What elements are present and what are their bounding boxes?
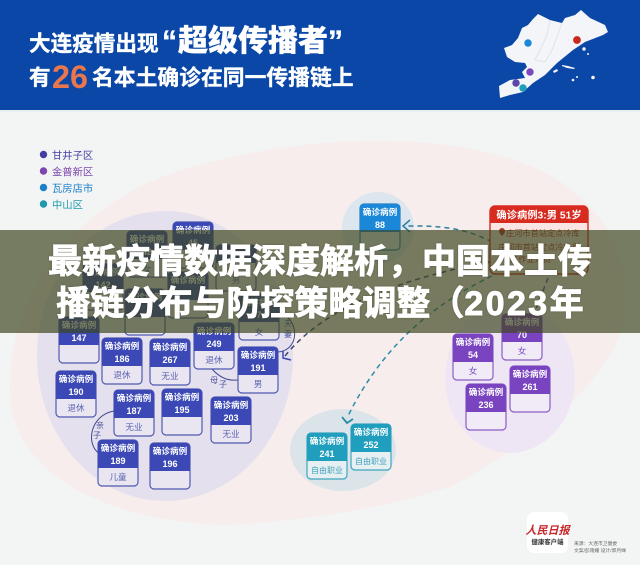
case card 267: 确诊病例 [153, 341, 188, 352]
case card 45 [173, 222, 213, 268]
case card 195: 195 [174, 405, 190, 415]
case card 190: 退休 [67, 402, 85, 413]
case card 191: 191 [250, 363, 266, 373]
case 3 callout card: 庄河市首站定点冷库 [506, 228, 580, 238]
case card 267: 267 [162, 355, 178, 365]
relationship arc: 亲子 [92, 411, 114, 454]
logo: People's Daily health client [526, 512, 571, 553]
teal cluster background [290, 409, 396, 491]
arrowhead: teal cluster [342, 417, 353, 423]
case card 203: 无业 [222, 429, 240, 439]
violet cluster background [445, 303, 575, 453]
case card 54: 确诊病例 [456, 336, 491, 347]
case card upper: 女 [143, 263, 152, 274]
case card 191 [238, 347, 278, 393]
case card 241: 自由职业 [311, 465, 343, 475]
case card 147: 确诊病例 [62, 319, 97, 330]
case card 女: 女 [255, 326, 264, 337]
case card 267 [150, 339, 190, 385]
case card 189: 确诊病例 [101, 442, 136, 453]
case card 252: 自由职业 [355, 456, 387, 466]
case card 261: 261 [522, 382, 538, 392]
case card 190: 确诊病例 [59, 373, 94, 384]
case card 186: 退休 [113, 369, 131, 380]
case card 236 [466, 384, 506, 430]
purple cluster background [37, 211, 293, 501]
header highlighted phrase: “ [162, 25, 177, 58]
case card center [168, 272, 208, 318]
case card 191: 确诊病例 [241, 349, 276, 360]
overlay headline [48, 242, 592, 323]
arrow: case 3 to teal cluster [347, 272, 500, 418]
case card 189: 189 [110, 456, 126, 466]
case card 190: 190 [68, 387, 84, 397]
case card 女 [239, 294, 279, 340]
case card 147 [59, 317, 99, 363]
logo: People's Daily health client: 人民日报 [526, 524, 571, 537]
legend: 瓦房店市 [52, 182, 93, 195]
case card 88: 确诊病例 [363, 206, 398, 217]
case card 249: 退休 [205, 354, 223, 365]
legend: 中山区 [52, 198, 83, 212]
case card lower center: 确诊病例 [128, 291, 163, 302]
case card 252: 确诊病例 [354, 426, 389, 437]
case card 241: 确诊病例 [310, 435, 345, 446]
case card 196 [150, 443, 190, 489]
case card 195 [162, 389, 202, 435]
case card 186: 确诊病例 [105, 340, 140, 351]
case 3 callout card: 确诊病例3:男 51岁 [496, 208, 582, 222]
case card 190 [56, 371, 96, 417]
case card upper [127, 231, 167, 277]
case card 54 [453, 334, 493, 380]
header highlighted phrase: ” [328, 25, 343, 58]
case card 187: 187 [126, 406, 142, 416]
case card 70: 女 [518, 345, 527, 356]
relationship arc: 母子 [210, 369, 238, 389]
case card 203 [211, 397, 251, 443]
icon: Dalian map [499, 10, 608, 98]
case card 241 [307, 433, 347, 479]
header line one: 大连疫情出现 [29, 31, 159, 56]
case card 236: 236 [478, 400, 494, 410]
legend: 甘井子区 [52, 149, 93, 162]
case card 88: 88 [375, 220, 385, 230]
case card 189: 儿童 [109, 471, 127, 482]
case card 142 [83, 264, 123, 310]
source credits: 来源：大连市卫健委 [574, 540, 617, 547]
case card 195: 确诊病例 [165, 391, 200, 402]
header line two prefix: 有 [29, 65, 51, 90]
case card 男: 男 [232, 275, 240, 285]
relationship arc: 母子: 子 [219, 380, 227, 389]
legend: 金普新区 [52, 166, 93, 178]
relationship arc: 亲子: 子 [93, 431, 101, 440]
case card 男 [216, 245, 256, 291]
pink background region [10, 141, 625, 525]
case card 249: 249 [206, 339, 222, 349]
header number 26: 26 [52, 59, 88, 95]
case card center: 确诊病例 [171, 274, 206, 285]
case card 女: 7 [256, 310, 262, 320]
overlay headline: 最新疫情数据深度解析，中国本土传 [48, 243, 592, 281]
case card 54: 54 [468, 350, 478, 360]
arrow: case 3 to left cluster [285, 262, 490, 356]
relationship arc: 亲子: 亲 [96, 420, 104, 430]
case 3 callout card: 庄河市首站定点冷库员 [498, 242, 580, 252]
arrowhead: left cluster [283, 351, 291, 360]
case card 186: 186 [114, 354, 130, 364]
case card 186 [102, 338, 142, 384]
relationship arc: 夫妻 [278, 311, 295, 352]
case card upper: 42 [142, 247, 152, 257]
arrow: case 3 to case 88 [405, 226, 492, 242]
arrow: case 3 to case 70 [534, 278, 548, 314]
case card 189 [98, 440, 138, 486]
header line two: 名本土确诊在同一传播链上 [92, 65, 354, 90]
case card 142: 确诊病例 [86, 266, 121, 277]
case card upper: 确诊病例 [130, 233, 165, 244]
overlay band [0, 230, 640, 333]
case card 191: 男 [254, 379, 262, 389]
blue cluster background [342, 192, 414, 264]
case card 203: 确诊病例 [214, 399, 249, 410]
case card 女: 确诊病例 [242, 296, 277, 307]
case card 196: 196 [162, 459, 178, 469]
legend [40, 149, 93, 212]
arrowhead: case 88 [403, 220, 410, 232]
case card 236: 确诊病例 [469, 386, 504, 397]
header banner [0, 0, 640, 112]
case card 252: 252 [363, 440, 379, 450]
icon: location pin [499, 228, 505, 236]
relationship arc: 夫妻: 夫 [284, 318, 292, 328]
case card lower center [125, 289, 165, 335]
case card 261: 确诊病例 [513, 368, 548, 379]
case card 249: 确诊病例 [197, 325, 232, 336]
case card 142: 142 [95, 280, 111, 290]
case card 54: 女 [469, 365, 478, 376]
overlay headline: 播链分布与防控策略调整（2023年 [56, 285, 584, 323]
case card 88 [360, 204, 400, 250]
case card 70 [502, 314, 542, 360]
case card 261 [510, 366, 550, 412]
case 3 callout card: 工作业人员 [510, 254, 551, 264]
logo: People's Daily health client: 健康客户端 [532, 537, 564, 546]
source credits: 文案/彭雨姗 设计/郭月婵 [574, 547, 626, 554]
relationship arc: 母子: 母 [210, 376, 218, 385]
case card 147: 147 [71, 333, 87, 343]
case card 196: 确诊病例 [153, 445, 188, 456]
case card 45: 45 [188, 238, 198, 248]
case card 241: 241 [319, 449, 335, 459]
case card 187: 无业 [125, 422, 143, 432]
case card 45: 确诊病例 [176, 224, 211, 235]
case 3 callout card [490, 206, 588, 274]
case card 267: 无业 [161, 371, 179, 381]
case card 203: 203 [223, 413, 239, 423]
case card 70: 确诊病例 [505, 316, 540, 327]
header highlighted phrase: 超级传播者 [178, 24, 328, 58]
case card 252 [351, 424, 391, 470]
source credits [574, 540, 626, 554]
case card 70: 70 [517, 330, 527, 340]
relationship arc: 夫妻: 妻 [284, 329, 292, 339]
case card 187 [114, 390, 154, 436]
case card 187: 确诊病例 [117, 392, 152, 403]
case card 249 [194, 323, 234, 369]
